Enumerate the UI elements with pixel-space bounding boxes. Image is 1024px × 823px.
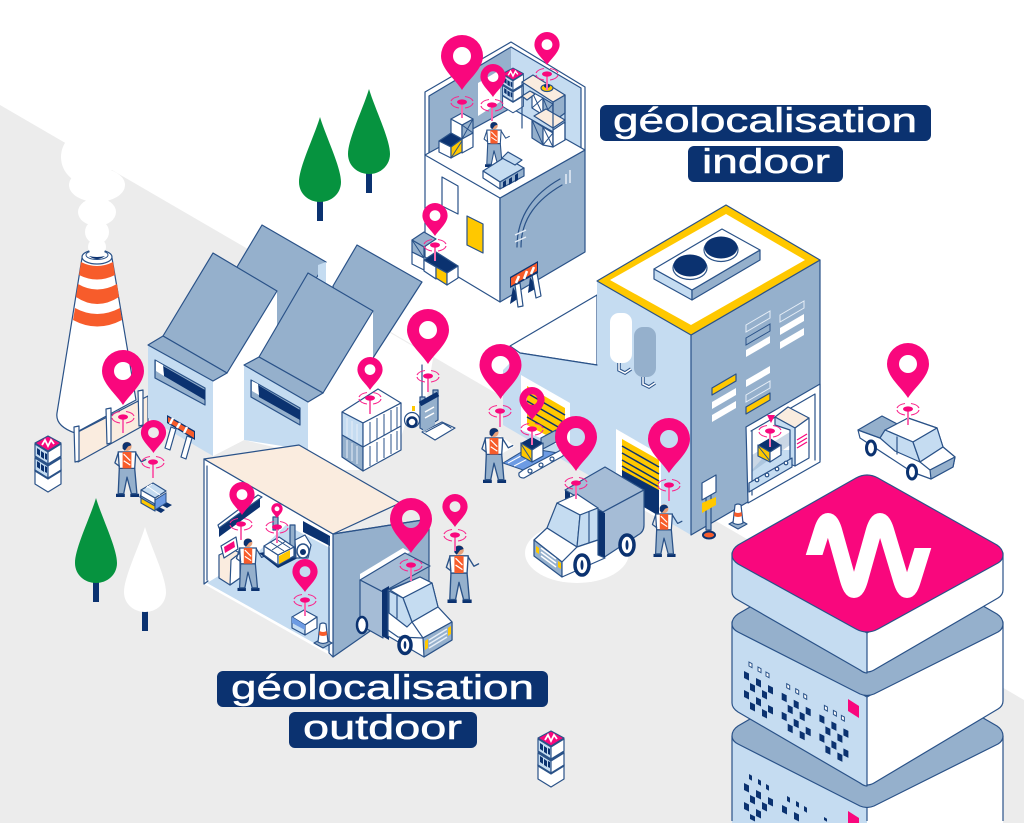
conveyor bbox=[749, 458, 792, 492]
tree bbox=[299, 117, 341, 221]
back roof 2 bbox=[333, 245, 422, 358]
factory chimney with smoke bbox=[57, 130, 136, 433]
shipping container bbox=[342, 389, 401, 471]
worker by truck bbox=[652, 504, 682, 557]
outdoor shed bbox=[204, 445, 429, 657]
worker at kiosk bbox=[236, 538, 266, 591]
tree bbox=[348, 89, 390, 193]
heading: géolocalisation indoor: géolocalisation bbox=[613, 102, 917, 140]
worker at pallet bbox=[115, 442, 146, 497]
box bbox=[758, 438, 781, 452]
house B roof bbox=[259, 273, 373, 393]
pin bbox=[648, 418, 690, 501]
yellow door bbox=[467, 216, 483, 253]
roof bbox=[204, 445, 400, 534]
kiosk bbox=[219, 537, 240, 585]
conduit bbox=[517, 179, 562, 247]
heading: géolocalisation indoor bbox=[600, 102, 931, 182]
pin bbox=[441, 35, 483, 118]
fence bbox=[74, 390, 148, 462]
pin bbox=[759, 415, 781, 447]
shelf bottom row bbox=[532, 120, 543, 145]
second unit bbox=[860, 622, 1003, 785]
pin bbox=[519, 387, 545, 445]
pin bbox=[102, 350, 144, 433]
pin bbox=[480, 64, 506, 121]
pallet truck bbox=[140, 483, 172, 513]
forklift pallet bbox=[259, 517, 311, 568]
house B window bbox=[251, 380, 300, 425]
first unit bbox=[860, 553, 1003, 672]
roof shelving bbox=[503, 68, 565, 147]
heading: géolocalisation outdoor: outdoor bbox=[303, 709, 462, 747]
worker at conveyor bbox=[482, 428, 513, 483]
traffic cone bbox=[729, 504, 747, 529]
chimney body bbox=[57, 258, 136, 433]
traffic cone bbox=[314, 623, 332, 648]
side bbox=[333, 519, 429, 657]
pin bbox=[480, 344, 522, 427]
rooftop unit bbox=[654, 269, 692, 300]
back roof 1 bbox=[237, 225, 326, 345]
mini server left bbox=[35, 436, 61, 492]
worker outdoors bbox=[446, 545, 479, 603]
interior bbox=[204, 459, 333, 657]
hand truck bbox=[404, 365, 455, 440]
right facade bbox=[500, 150, 585, 302]
annex roof bbox=[510, 295, 597, 365]
pin bbox=[887, 343, 929, 425]
logo bbox=[810, 521, 926, 590]
car bbox=[858, 416, 955, 479]
house A window bbox=[155, 360, 205, 405]
roof floor bbox=[425, 108, 585, 198]
left facade bbox=[425, 42, 585, 302]
house A wall bbox=[213, 291, 277, 456]
pipes on pallet bbox=[483, 152, 524, 189]
tree bbox=[75, 498, 117, 602]
house A roof bbox=[163, 253, 277, 373]
inner left wall bbox=[429, 47, 511, 157]
pin bbox=[442, 494, 468, 551]
pin bbox=[407, 309, 449, 392]
pin bbox=[229, 482, 255, 540]
white tree bbox=[124, 527, 166, 631]
post sign bbox=[702, 475, 716, 538]
barrier bbox=[510, 261, 541, 307]
pink top bbox=[732, 475, 1003, 632]
indoor building bbox=[425, 42, 585, 302]
main building bbox=[503, 205, 820, 535]
conveyor with box bbox=[482, 430, 564, 478]
server stack bbox=[732, 475, 1003, 823]
crates by indoor building bbox=[412, 232, 458, 285]
white ground under delivery truck bbox=[525, 523, 629, 583]
pin bbox=[555, 416, 597, 499]
box on floor bbox=[292, 610, 317, 635]
right facade bbox=[691, 260, 820, 535]
pin bbox=[534, 32, 560, 90]
house B wall bbox=[308, 311, 373, 470]
heading: géolocalisation indoor: indoor bbox=[702, 143, 830, 181]
pin bbox=[141, 420, 166, 478]
barrier bbox=[165, 415, 195, 459]
smoke bbox=[61, 130, 125, 256]
mini server bbox=[503, 68, 523, 113]
cabinet bbox=[775, 407, 809, 428]
roof window bbox=[478, 70, 500, 116]
indicator dots row 2 bbox=[744, 671, 848, 822]
indicator dots row 3 bbox=[744, 774, 827, 822]
wall window bbox=[442, 177, 458, 214]
roof bbox=[597, 205, 820, 335]
pin bbox=[390, 498, 432, 581]
slats bbox=[712, 301, 804, 422]
shelf boards bbox=[522, 75, 565, 102]
mini server bottom bbox=[538, 731, 564, 787]
stacked boxes on roof bbox=[439, 113, 473, 158]
tanks bbox=[610, 313, 632, 363]
status lights bbox=[848, 699, 859, 718]
white ground around warehouses bbox=[213, 280, 433, 470]
worker on roof bbox=[484, 122, 509, 167]
heading: géolocalisation outdoor bbox=[217, 669, 548, 748]
delivery truck bbox=[534, 467, 644, 577]
warehouses bbox=[148, 225, 422, 470]
inner right wall bbox=[511, 47, 581, 148]
frame bbox=[204, 459, 333, 657]
pin bbox=[357, 357, 383, 414]
loading door 2 bbox=[616, 429, 661, 520]
machine bay bbox=[746, 384, 820, 503]
pin bbox=[266, 503, 288, 543]
pin bbox=[292, 559, 318, 616]
third unit bbox=[867, 732, 1003, 823]
left facade bbox=[503, 281, 691, 535]
heading: géolocalisation outdoor: géolocalisation bbox=[231, 669, 534, 707]
pin bbox=[422, 203, 448, 261]
shelf top row bbox=[532, 92, 543, 115]
outdoor truck bbox=[357, 548, 452, 657]
loading door 1 bbox=[521, 375, 570, 450]
